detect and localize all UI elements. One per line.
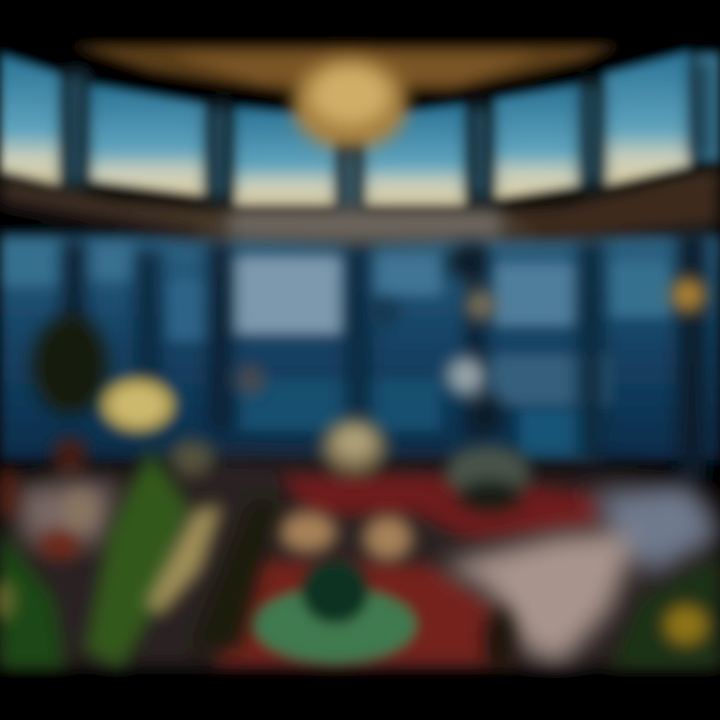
dining floor and tablecloths [0,455,720,670]
window mullions [62,60,710,480]
ceiling band [70,45,620,92]
foreground plants right [484,555,720,674]
red tablecloth [0,470,600,665]
table centrepiece items [170,419,530,560]
upper windows: sky [0,52,720,205]
lamp at left [100,377,176,433]
middle horizontal beam [0,168,720,245]
cream cloth highlights [440,485,720,665]
chandelier [292,58,408,150]
foreground leaf highlight [0,490,222,620]
dark tree at left [32,315,108,480]
lower windows: sea [0,235,720,460]
foreground plants left [0,450,280,670]
pendant lights and distant details [235,246,705,435]
green bowl [253,560,417,663]
